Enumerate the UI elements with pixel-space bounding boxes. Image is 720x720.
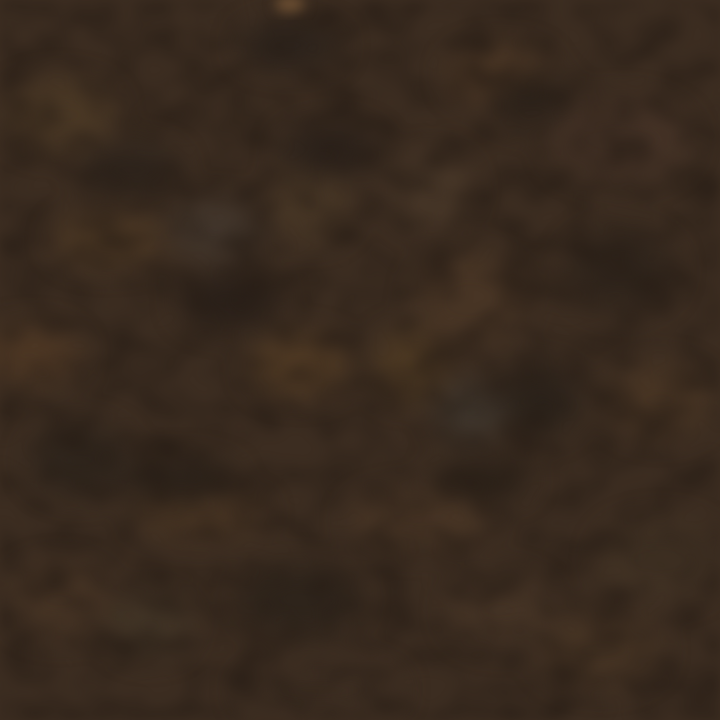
bright spot at top edge bbox=[275, 0, 305, 12]
